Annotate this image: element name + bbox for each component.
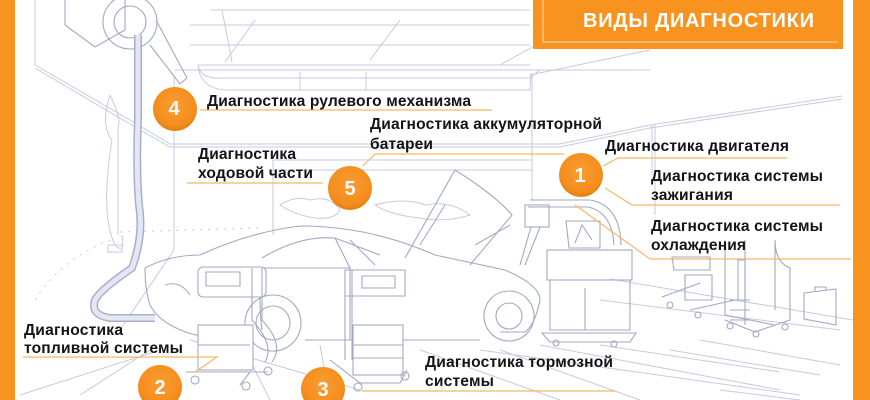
callout 3: brakes: системы [425,373,494,390]
callout 5: chassis [187,146,372,210]
callout 5: battery [363,116,602,166]
title box: ВИДЫ ДИАГНОСТИКИ [583,10,814,32]
callout 1: engine, ignition, cooling: зажигания [651,187,733,204]
callout 3: brakes [301,354,615,400]
callout 5: battery: батареи [370,136,433,153]
right orange border [853,0,870,400]
callout 5: chassis: 5 [344,178,356,200]
callout 1: engine, ignition, cooling: 1 [574,165,586,187]
callout 4: steering: Диагностика рулевого механизма [207,93,471,110]
fuel diagnostic cart [186,267,277,390]
brake diagnostic cart [330,270,409,391]
callout 5: battery: Диагностика аккумуляторной [370,116,602,133]
test equipment and case at right [662,240,836,337]
callout 3: brakes: Диагностика тормозной [425,354,613,371]
exhaust hose [94,35,155,318]
callout 5: chassis: ходовой части [198,165,313,182]
callout 1: engine, ignition, cooling: охлаждения [651,237,746,254]
left orange border [0,0,15,400]
callout 1: engine, ignition, cooling: Диагностика двигателя [605,138,789,155]
engine diagnostic station [520,200,636,347]
callout 2: fuel: 2 [154,377,166,399]
callout 2: fuel [23,322,217,400]
car [145,170,540,351]
callout 1: engine, ignition, cooling: Диагностика системы [651,218,823,235]
callout 1: engine, ignition, cooling: Диагностика системы [651,168,823,185]
hose reel [65,0,187,84]
callout 2: fuel: топливной системы [24,340,183,357]
title box [533,0,843,49]
callout 1: engine, ignition, cooling [559,138,851,259]
callout 4: steering [153,87,492,131]
callout 2: fuel: Диагностика [24,322,123,339]
callout 5: chassis: Диагностика [198,146,296,163]
callout 4: steering: 4 [168,98,180,120]
